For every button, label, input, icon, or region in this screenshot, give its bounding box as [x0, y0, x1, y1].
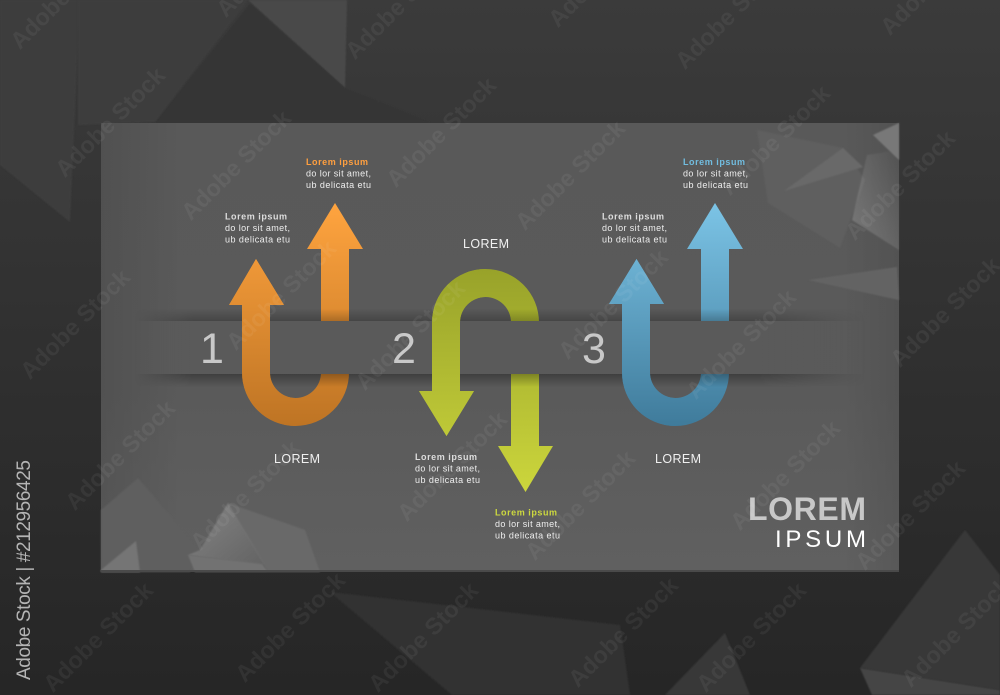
text block: orange upper: ub delicata etu	[306, 180, 371, 190]
watermarks: Adobe Stock	[230, 566, 351, 687]
watermarks: Adobe Stock	[185, 434, 306, 555]
text block: orange lower	[225, 212, 290, 244]
label: LOREM orange: LOREM	[274, 452, 320, 466]
panel: main card	[101, 123, 899, 572]
arrow: green left shaft over band	[419, 269, 486, 436]
side credit: Adobe Stock | #212956425	[14, 460, 35, 680]
text block: blue upper: do lor sit amet,	[683, 168, 748, 178]
text block: green left: Lorem ipsum	[415, 452, 477, 462]
watermarks: Adobe Stock	[50, 61, 171, 182]
text block: blue lower: do lor sit amet,	[602, 223, 667, 233]
text block: orange upper	[306, 157, 371, 190]
step number 1: 1	[200, 325, 224, 373]
title: LOREM IPSUM: IPSUM	[775, 526, 866, 553]
text block: green right	[495, 508, 560, 540]
watermarks: Adobe Stock	[15, 263, 136, 384]
watermarks: Adobe Stock	[563, 571, 684, 692]
watermarks: Adobe Stock	[60, 394, 181, 515]
watermarks: Adobe Stock	[392, 405, 513, 526]
arrow: green inverted U (under band)	[419, 269, 553, 492]
label: LOREM green: LOREM	[463, 237, 509, 251]
title: LOREM IPSUM	[748, 491, 866, 553]
watermarks: Adobe Stock	[840, 124, 961, 245]
watermarks: Adobe Stock	[38, 576, 159, 695]
text block: orange lower: do lor sit amet,	[225, 223, 290, 233]
text block: blue upper: ub delicata etu	[683, 180, 748, 190]
watermarks: Adobe Stock	[691, 576, 812, 695]
text block: green right: ub delicata etu	[495, 530, 560, 540]
text block: green right: do lor sit amet,	[495, 519, 560, 529]
arrow: orange U (under band)	[229, 203, 363, 426]
text block: blue lower	[602, 212, 667, 244]
text block: orange upper: do lor sit amet,	[306, 168, 371, 178]
watermarks: Adobe Stock	[681, 283, 802, 404]
text block: blue upper	[683, 157, 748, 190]
text block: green right: Lorem ipsum	[495, 508, 557, 518]
arrow: blue left shaft over band	[609, 259, 676, 426]
watermarks: Adobe Stock	[553, 243, 674, 364]
text block: orange lower: Lorem ipsum	[225, 212, 287, 222]
text block: orange upper: Lorem ipsum	[306, 157, 368, 167]
watermarks: Adobe Stock	[725, 414, 846, 535]
text block: blue lower: Lorem ipsum	[602, 212, 664, 222]
text block: green left: ub delicata etu	[415, 475, 480, 485]
arrow: orange left shaft over band	[229, 259, 296, 426]
step number 3: 3	[582, 325, 606, 373]
watermarks: Adobe Stock	[510, 114, 631, 235]
text block: green left	[415, 452, 480, 485]
text block: blue upper: Lorem ipsum	[683, 157, 745, 167]
text block: orange lower: ub delicata etu	[225, 234, 290, 244]
watermarks: Adobe Stock	[850, 454, 971, 575]
text block: blue lower: ub delicata etu	[602, 234, 667, 244]
title: LOREM IPSUM: LOREM	[748, 491, 866, 527]
watermarks: Adobe Stock	[520, 444, 641, 565]
watermarks: Adobe Stock	[176, 104, 297, 225]
watermarks: Adobe Stock	[715, 79, 836, 200]
text block: green left: do lor sit amet,	[415, 464, 480, 474]
watermarks: Adobe Stock	[221, 234, 342, 355]
band: horizontal strip with shadows	[154, 311, 832, 385]
watermarks: Adobe Stock	[363, 576, 484, 695]
step number 2: 2	[392, 325, 416, 373]
watermarks: Adobe Stock	[381, 71, 502, 192]
label: LOREM blue: LOREM	[655, 452, 701, 466]
watermarks: Adobe Stock	[350, 274, 471, 395]
arrow: blue U (under band)	[609, 203, 743, 426]
